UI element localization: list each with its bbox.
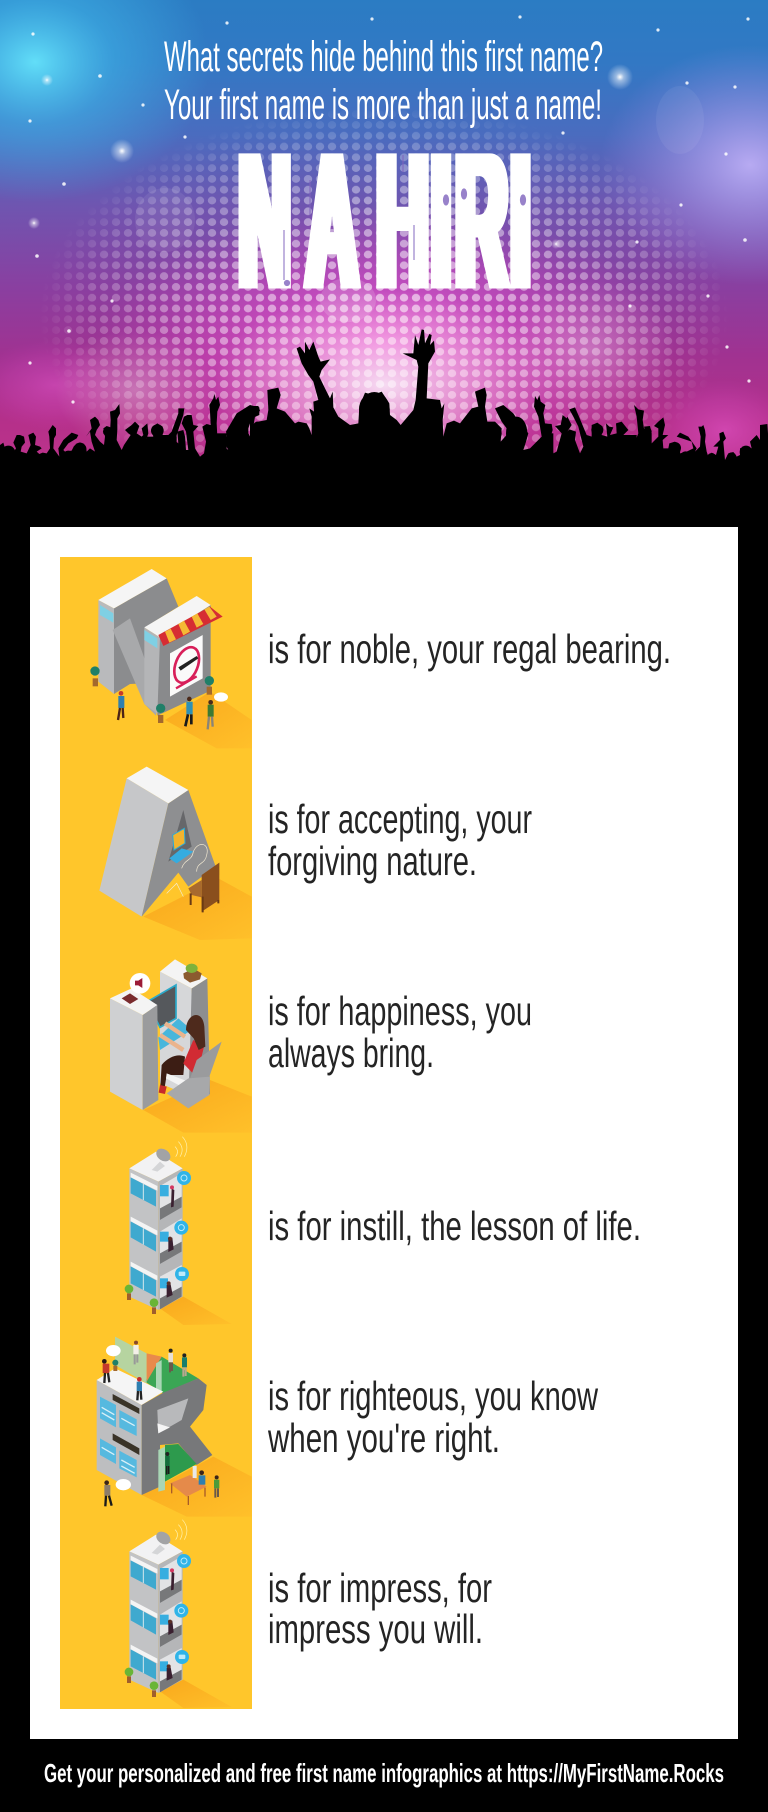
crowd silhouette — [0, 329, 768, 528]
text: A meaning: is for accepting, your — [268, 796, 532, 842]
text: A meaning — [268, 796, 532, 884]
icon: isometric letter I (first) — [125, 1137, 232, 1325]
icon: isometric letter I (second) — [125, 1520, 232, 1708]
text: second I meaning: impress you will. — [268, 1606, 483, 1652]
people on the ground — [118, 691, 214, 729]
text: A meaning: forgiving nature. — [268, 838, 477, 884]
yellow illustration column — [60, 557, 252, 1709]
text: H meaning — [268, 988, 532, 1076]
white content panel — [30, 527, 738, 1739]
text: R meaning — [267, 1373, 598, 1461]
text: H meaning: always bring. — [268, 1030, 434, 1076]
header concert backdrop — [0, 0, 768, 485]
text: H meaning: is for happiness, you — [268, 988, 532, 1034]
text: second I meaning — [268, 1565, 492, 1652]
icon: isometric letter A — [99, 767, 252, 940]
people on and around the R — [102, 1341, 219, 1506]
sparkles and stars — [28, 15, 751, 404]
seated woman at desk — [159, 1015, 222, 1108]
icon: isometric letter R — [97, 1337, 252, 1517]
icon: isometric letter N — [90, 569, 252, 748]
icon: isometric letter H — [110, 959, 252, 1133]
header question text — [164, 33, 603, 129]
name title: NAHIRI — [239, 113, 531, 330]
text: second I meaning: is for impress, for — [268, 1565, 492, 1611]
text: R meaning: is for righteous, you know — [268, 1373, 598, 1419]
text: R meaning: when you're right. — [267, 1415, 500, 1461]
